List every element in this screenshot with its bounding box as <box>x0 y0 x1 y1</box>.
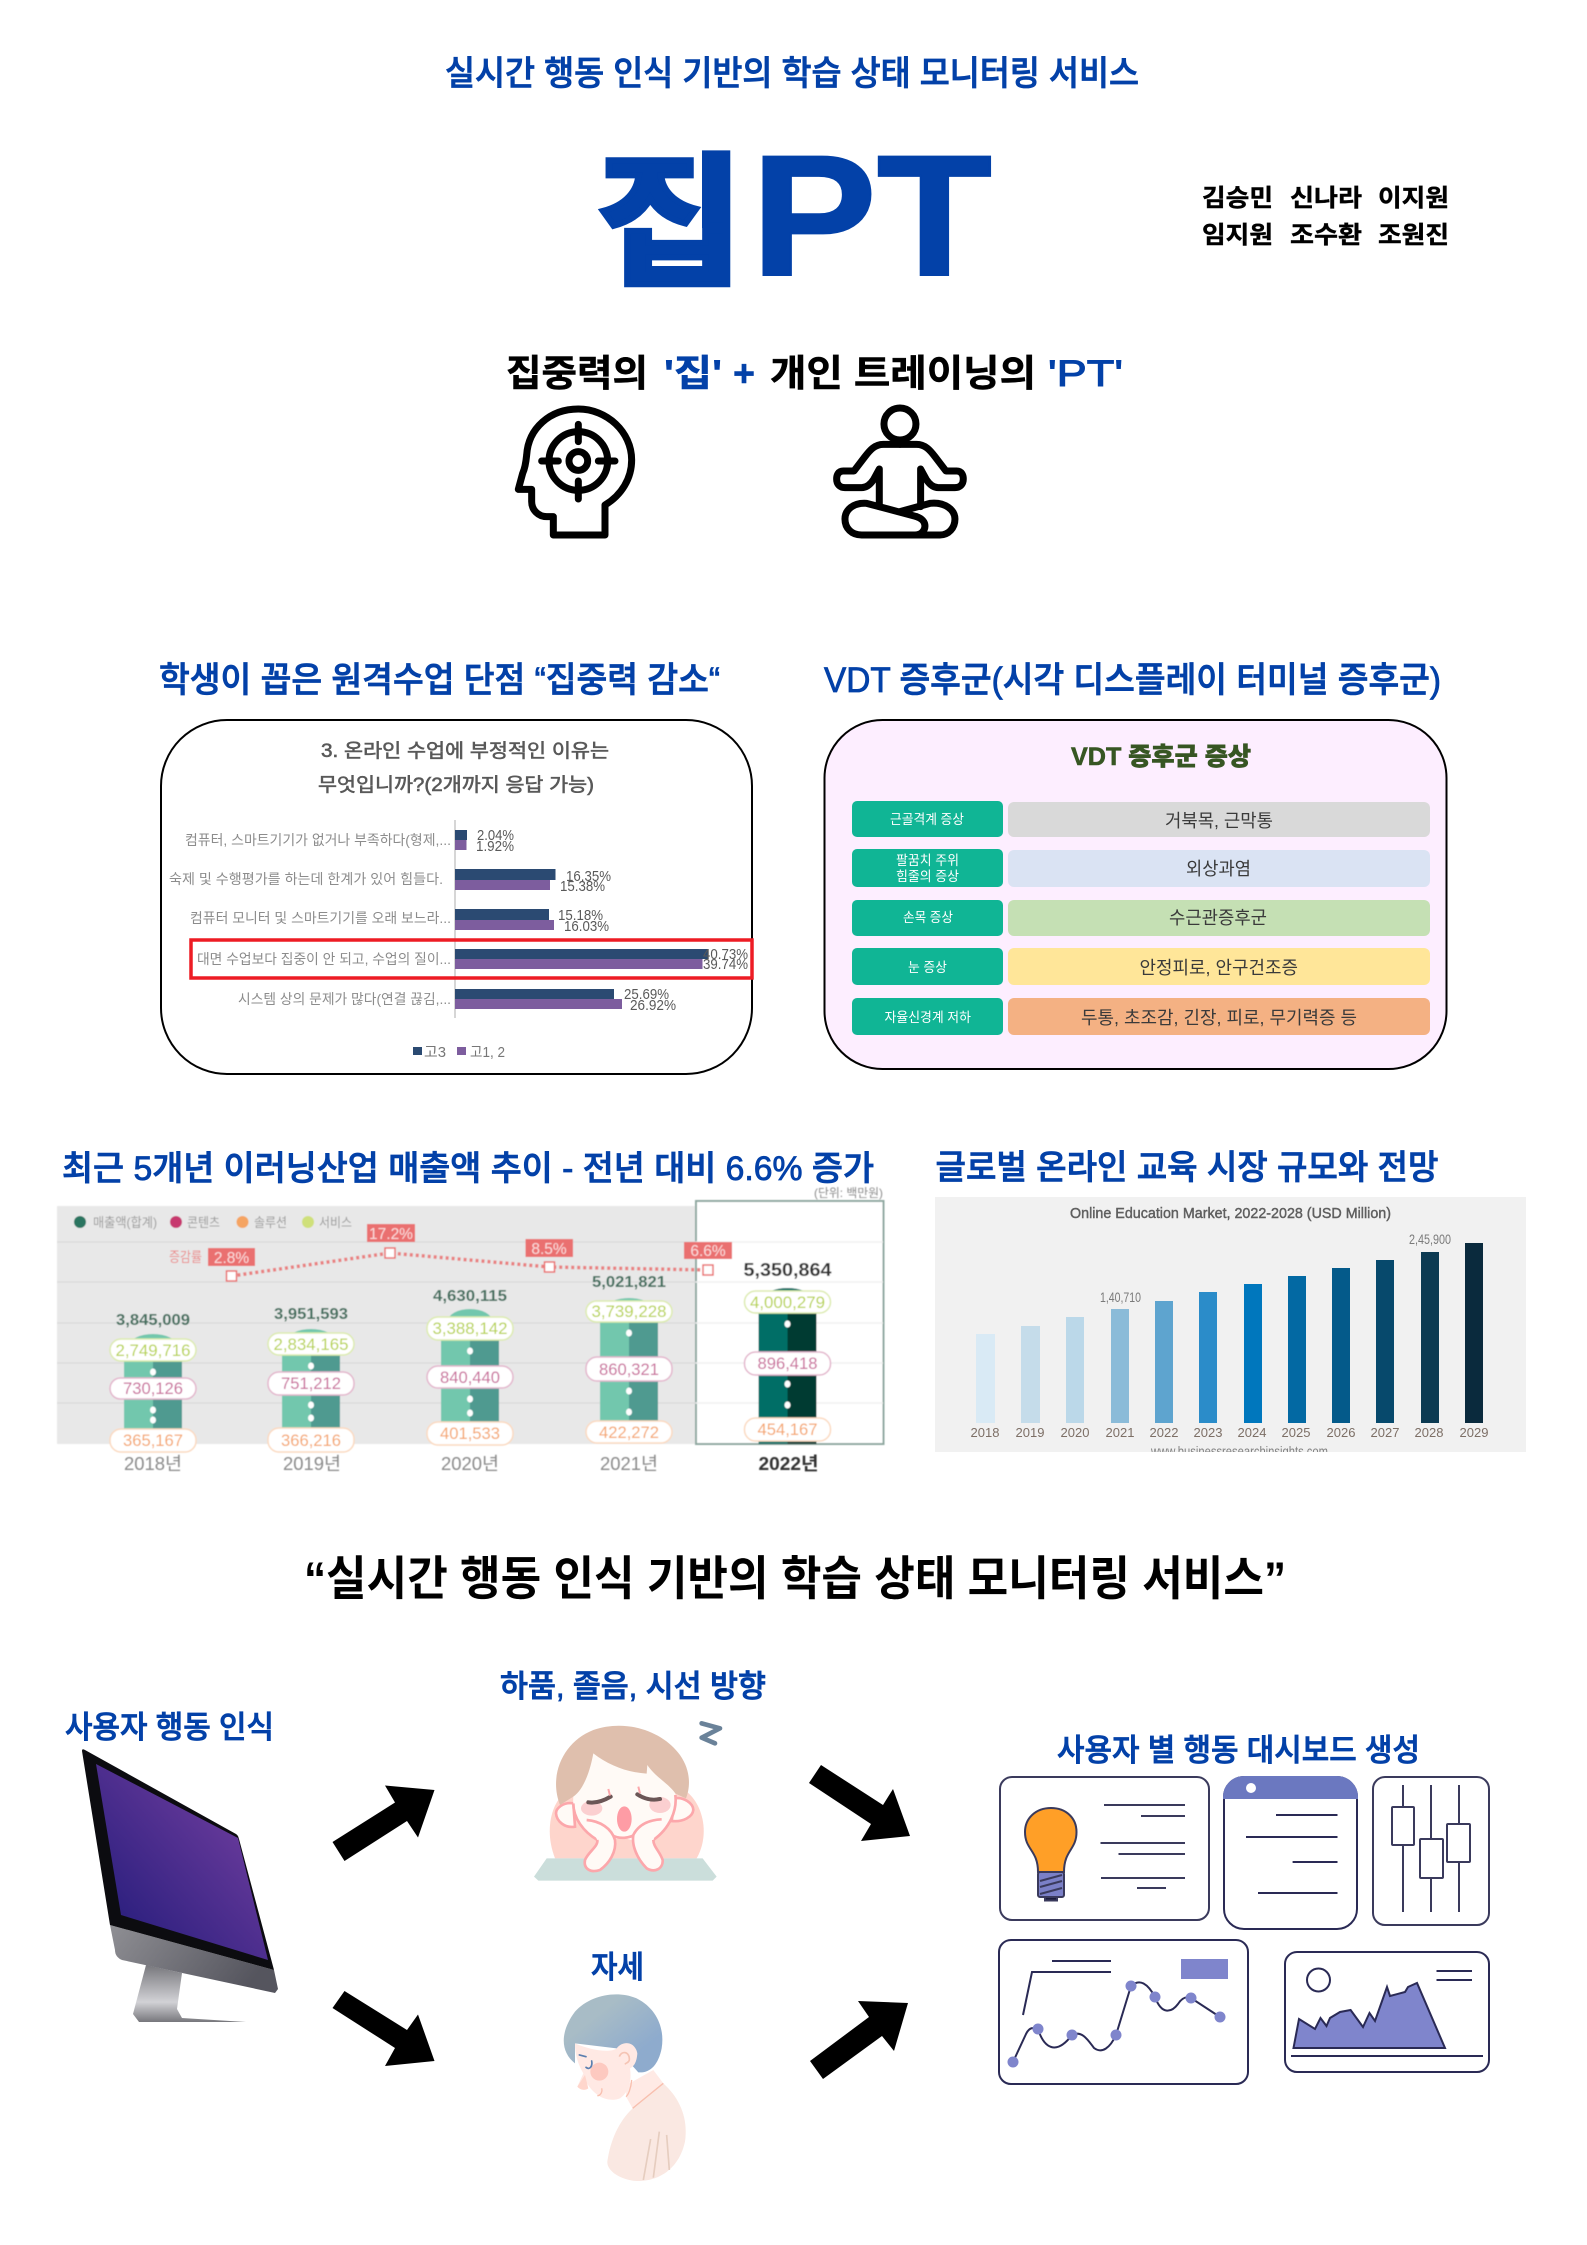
legend <box>74 1215 352 1230</box>
subtitle: + <box>733 353 755 394</box>
subtitle: 개인 트레이닝의 <box>770 353 1036 394</box>
team members: 임지원 <box>1202 222 1273 249</box>
row labels <box>852 801 1003 1035</box>
column 2019: 3,951,593 <box>274 1306 348 1323</box>
label: user behavior recognition: 사용자 행동 인식 <box>65 1710 274 1745</box>
bar value labels: 2,45,900 <box>1409 1231 1451 1247</box>
category labels: 대면 수업보다 집중이 안 되고, 수업의 질이... <box>197 951 451 967</box>
year axis labels: 2020 <box>1061 1425 1089 1440</box>
value labels: 15.18% <box>558 907 603 924</box>
illustration: slouching student <box>564 1994 686 2181</box>
panel: VDT symptoms table: 거북목, 근막통 <box>1165 811 1273 831</box>
panel title: VDT 증후군 증상 <box>1071 743 1251 771</box>
column 2018: 2,749,716 <box>116 1341 190 1360</box>
subtitle <box>506 353 1123 394</box>
heading: VDT syndrome: VDT 증후군(시각 디스플레이 터미널 증후군) <box>824 661 1441 700</box>
dashboard card: lightbulb <box>1000 1777 1209 1920</box>
chart title: 무엇입니까?(2개까지 응답 가능) <box>318 774 594 796</box>
icon: head with target <box>518 409 632 535</box>
dashboard card: area chart <box>1285 1952 1489 2072</box>
growth rate line: 증감률 <box>169 1249 202 1265</box>
logo: 집PT <box>596 120 992 312</box>
team members: 신나라 <box>1290 185 1362 212</box>
subtitle: 집중력의 <box>506 353 648 394</box>
column 2021 <box>586 1274 672 1443</box>
year labels: 2018년 <box>124 1454 182 1474</box>
chart: online education market: Online Education Market, 2022-2028 (USD Million) <box>1070 1205 1391 1222</box>
value labels: 16.35% <box>566 868 611 885</box>
panel: VDT symptoms table: 힘줄의 증상 <box>896 869 959 884</box>
year axis labels: 2019 <box>1016 1425 1044 1440</box>
team members: 김승민 <box>1202 185 1273 212</box>
subtitle: 'PT' <box>1048 353 1123 394</box>
chart title <box>318 740 609 796</box>
bar value labels: 1,40,710 <box>1100 1289 1141 1305</box>
label: per-user dashboard: 사용자 별 행동 대시보드 생성 <box>1057 1733 1420 1768</box>
column 2022: 4,000,279 <box>750 1293 825 1312</box>
year labels: 2021년 <box>600 1454 658 1474</box>
value labels: 26.92% <box>630 997 676 1014</box>
value labels: 39.74% <box>703 956 748 973</box>
panel: VDT symptoms table: 근골격계 증상 <box>890 812 964 827</box>
logo: 집PT: PT <box>751 120 992 312</box>
dashboard card: browser window <box>1224 1777 1357 1929</box>
year axis labels: 2026 <box>1327 1425 1355 1440</box>
year axis labels: 2024 <box>1238 1425 1266 1440</box>
legend: 고1, 2 <box>470 1044 505 1061</box>
column 2021: 5,021,821 <box>592 1274 666 1291</box>
column 2020: 3,388,142 <box>432 1319 508 1338</box>
growth rate line: 8.5% <box>531 1241 567 1258</box>
category labels: 컴퓨터 모니터 및 스마트기기를 오래 보느라... <box>190 910 451 926</box>
icon: computer monitor <box>82 1749 278 2022</box>
panel: VDT symptoms table: 자율신경계 저하 <box>884 1010 972 1025</box>
row values <box>1008 802 1430 1035</box>
heading: service quote: “실시간 행동 인식 기반의 학습 상태 모니터링 서비스” <box>304 1552 1286 1605</box>
chart: online education market <box>935 1197 1526 1459</box>
year axis labels: 2022 <box>1150 1425 1178 1440</box>
category labels <box>169 832 451 1007</box>
category labels: 시스템 상의 문제가 많다(연결 끊김,... <box>238 991 451 1007</box>
legend: 매출액(합계) <box>93 1215 157 1230</box>
team members: 이지원 <box>1378 185 1449 212</box>
heading: e-learning revenue: 최근 5개년 이러닝산업 매출액 추이 - 전년 대비 6.6% 증가 <box>62 1150 874 1188</box>
heading: global online education market: 글로벌 온라인 교육 시장 규모와 전망 <box>936 1149 1438 1187</box>
category labels: 숙제 및 수행평가를 하는데 한계가 있어 힘들다. <box>169 871 443 887</box>
dashboard card: sliders <box>1373 1777 1489 1925</box>
category labels: 컴퓨터, 스마트기기가 없거나 부족하다(형제,... <box>185 832 451 848</box>
legend <box>413 1044 505 1061</box>
team members: 조수환 <box>1290 222 1362 249</box>
title: 실시간 행동 인식 기반의 학습 상태 모니터링 서비스 <box>445 55 1139 93</box>
label: yawn, drowsiness, gaze: 하품, 졸음, 시선 방향 <box>500 1669 766 1704</box>
year axis labels: 2023 <box>1194 1425 1222 1440</box>
value labels <box>476 827 748 1014</box>
bars <box>976 1243 1483 1423</box>
team members: 조원진 <box>1378 222 1449 249</box>
year labels: 2019년 <box>283 1454 341 1474</box>
legend: 솔루션 <box>254 1215 287 1230</box>
panel: VDT symptoms table: 팔꿈치 주위 <box>896 853 959 868</box>
value labels: 40.73% <box>703 946 748 963</box>
year axis labels: 2027 <box>1371 1425 1399 1440</box>
value labels: 25.69% <box>624 986 669 1003</box>
highlight box <box>191 940 752 978</box>
arrow: to posture <box>332 1991 434 2066</box>
column 2021: 422,272 <box>599 1423 659 1442</box>
column 2018: 365,167 <box>123 1431 183 1450</box>
chart title: 3. 온라인 수업에 부정적인 이유는 <box>321 740 609 762</box>
column 2022: 454,167 <box>758 1420 818 1439</box>
column 2019: 2,834,165 <box>274 1335 348 1354</box>
column 2020: 401,533 <box>440 1424 500 1443</box>
panel: VDT symptoms table: 손목 증상 <box>903 910 953 925</box>
panel: VDT symptoms table: 눈 증상 <box>908 960 947 975</box>
panel: VDT symptoms table: 안정피로, 안구건조증 <box>1140 958 1298 978</box>
legend: 서비스 <box>319 1215 352 1230</box>
column 2020: 4,630,115 <box>433 1288 507 1305</box>
value labels: 2.04% <box>477 827 514 844</box>
subtitle: '집' <box>664 353 722 394</box>
year axis labels: 2029 <box>1460 1425 1488 1440</box>
dashboard card: line chart <box>999 1940 1248 2084</box>
chart: e-learning revenue <box>57 1186 884 1474</box>
panel: survey bar chart <box>161 720 752 1074</box>
column 2020 <box>427 1288 513 1445</box>
label: posture: 자세 <box>591 1950 644 1985</box>
value labels: 1.92% <box>476 838 514 855</box>
arrow: from yawning to dashboard <box>809 1765 910 1841</box>
column 2019: 751,212 <box>281 1374 341 1393</box>
column 2020: 840,440 <box>440 1368 500 1387</box>
year labels: 2022년 <box>758 1454 818 1474</box>
illustration: yawning student <box>534 1723 720 1881</box>
year labels <box>124 1454 818 1474</box>
year axis labels: 2018 <box>971 1425 999 1440</box>
panel: VDT symptoms table <box>824 720 1446 1069</box>
column 2018 <box>110 1312 196 1452</box>
panel: VDT symptoms table: 외상과염 <box>1186 859 1251 879</box>
chart: online education market: www.businessresearchinsights.com <box>1150 1443 1328 1459</box>
year labels: 2020년 <box>441 1454 499 1474</box>
year axis labels: 2025 <box>1282 1425 1310 1440</box>
panel: VDT symptoms table: 두통, 초조감, 긴장, 피로, 무기력증 등 <box>1081 1008 1357 1028</box>
logo: 집PT: 집 <box>596 145 745 304</box>
legend: 고3 <box>424 1044 446 1061</box>
value labels: 16.03% <box>564 918 609 935</box>
growth rate line <box>169 1224 732 1281</box>
year axis labels: 2028 <box>1415 1425 1443 1440</box>
growth rate line: 2.8% <box>214 1250 249 1267</box>
chart: e-learning revenue: (단위: 백만원) <box>814 1186 883 1200</box>
arrow: to yawning <box>332 1786 434 1861</box>
column 2022 <box>744 1260 832 1444</box>
column 2021: 3,739,228 <box>592 1302 666 1321</box>
column 2019 <box>268 1306 354 1452</box>
legend: 콘텐츠 <box>187 1215 220 1230</box>
arrow: from posture to dashboard <box>810 2001 908 2079</box>
column 2019: 366,216 <box>281 1431 341 1450</box>
value labels: 15.38% <box>560 878 605 895</box>
year axis labels: 2021 <box>1106 1425 1134 1440</box>
column 2022: 5,350,864 <box>744 1260 832 1280</box>
column 2018: 730,126 <box>123 1379 183 1398</box>
bar value labels <box>1100 1231 1451 1305</box>
growth rate line: 17.2% <box>369 1226 413 1243</box>
year axis labels <box>971 1428 1488 1437</box>
column 2022: 896,418 <box>758 1354 818 1373</box>
heading: remote class drawback: 학생이 꼽은 원격수업 단점 “집중력 감소“ <box>159 661 720 700</box>
column 2021: 860,321 <box>599 1360 659 1379</box>
bars <box>455 830 708 1009</box>
column 2018: 3,845,009 <box>116 1312 190 1329</box>
growth rate line: 6.6% <box>690 1243 726 1260</box>
icon: meditating person <box>837 408 963 535</box>
team members <box>1202 185 1449 249</box>
panel: VDT symptoms table: 수근관증후군 <box>1169 908 1267 928</box>
